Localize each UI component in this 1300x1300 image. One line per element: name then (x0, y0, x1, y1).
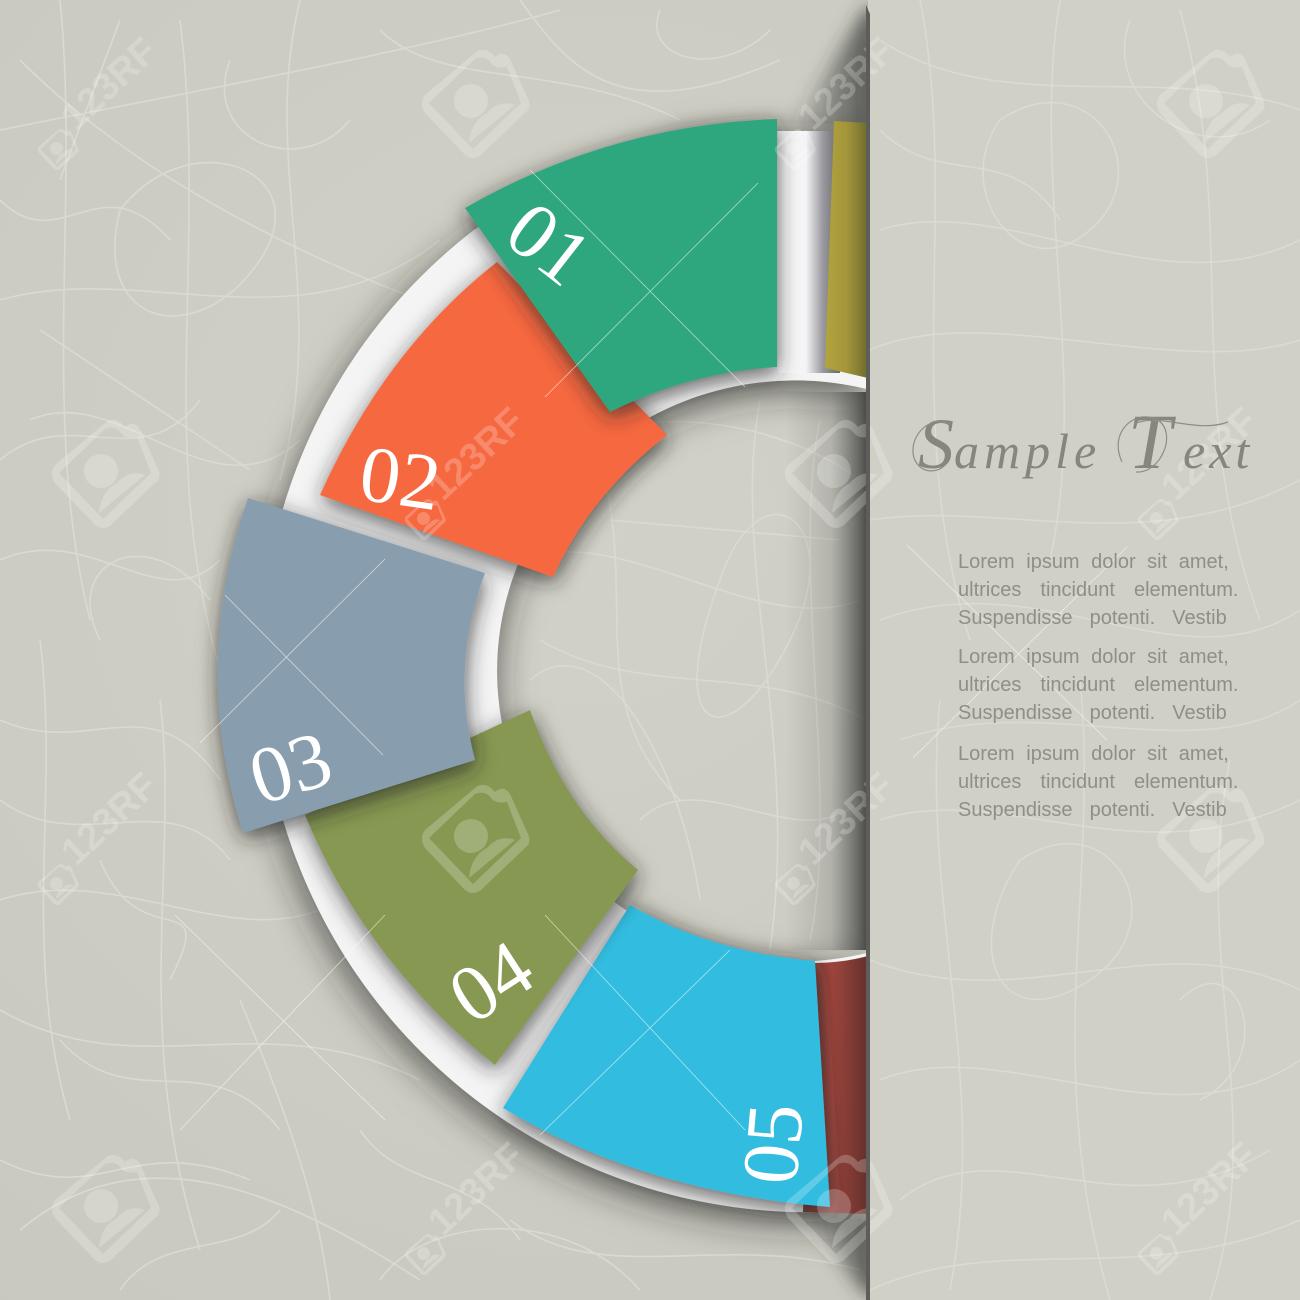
bottom edge shadow (812, 1213, 866, 1300)
watermarks: 123RF (1153, 400, 1266, 509)
number 05: 05 (726, 1100, 821, 1188)
segment 03: slate blue (218, 498, 485, 833)
thin crossing lines (175, 170, 1127, 1135)
body text: Suspendisse potenti. Vestib (958, 607, 1227, 629)
number 04: 04 (434, 924, 549, 1041)
segment 01: green (465, 119, 777, 412)
heading: sample text: ext (1183, 423, 1253, 479)
right panel (868, 0, 1300, 1300)
watermarks: 123RF (790, 30, 903, 139)
heading: sample text: S (918, 404, 954, 484)
heading: sample text: T (1128, 398, 1176, 485)
watermarks: 123RF (53, 30, 166, 139)
body text: Suspendisse potenti. Vestib (958, 799, 1227, 821)
watermarks: 123RF (420, 400, 533, 509)
heading: sample text: ample (954, 423, 1101, 479)
body text: Lorem ipsum dolor sit amet, (958, 743, 1229, 765)
gap shadow top (791, 0, 868, 131)
body text: Lorem ipsum dolor sit amet, (958, 551, 1229, 573)
segment: yellow tab (825, 121, 868, 378)
watermarks: 123RF (790, 765, 903, 874)
segment 02: orange (320, 262, 667, 577)
number 01: 01 (490, 185, 607, 303)
segment: red tab (803, 956, 868, 1214)
panel edge (866, 5, 870, 1300)
hole shadow at panel edge (798, 392, 866, 950)
watermarks: 123RF (1153, 1135, 1266, 1244)
body text (958, 551, 1238, 821)
body text: Lorem ipsum dolor sit amet, (958, 646, 1229, 668)
number 03: 03 (240, 715, 342, 822)
body text: ultrices tincidunt elementum. (958, 771, 1238, 793)
watermarks: 123RF (420, 1135, 533, 1244)
body text: ultrices tincidunt elementum. (958, 579, 1238, 601)
number 02: 02 (354, 430, 446, 528)
watermarks: 123RF (53, 765, 166, 874)
heading: sample text (913, 398, 1253, 485)
body text: Suspendisse potenti. Vestib (958, 702, 1227, 724)
body text: ultrices tincidunt elementum. (958, 674, 1238, 696)
segment 04: olive (305, 710, 638, 1065)
white ring (260, 131, 867, 1212)
segment 05: blue (503, 905, 830, 1207)
